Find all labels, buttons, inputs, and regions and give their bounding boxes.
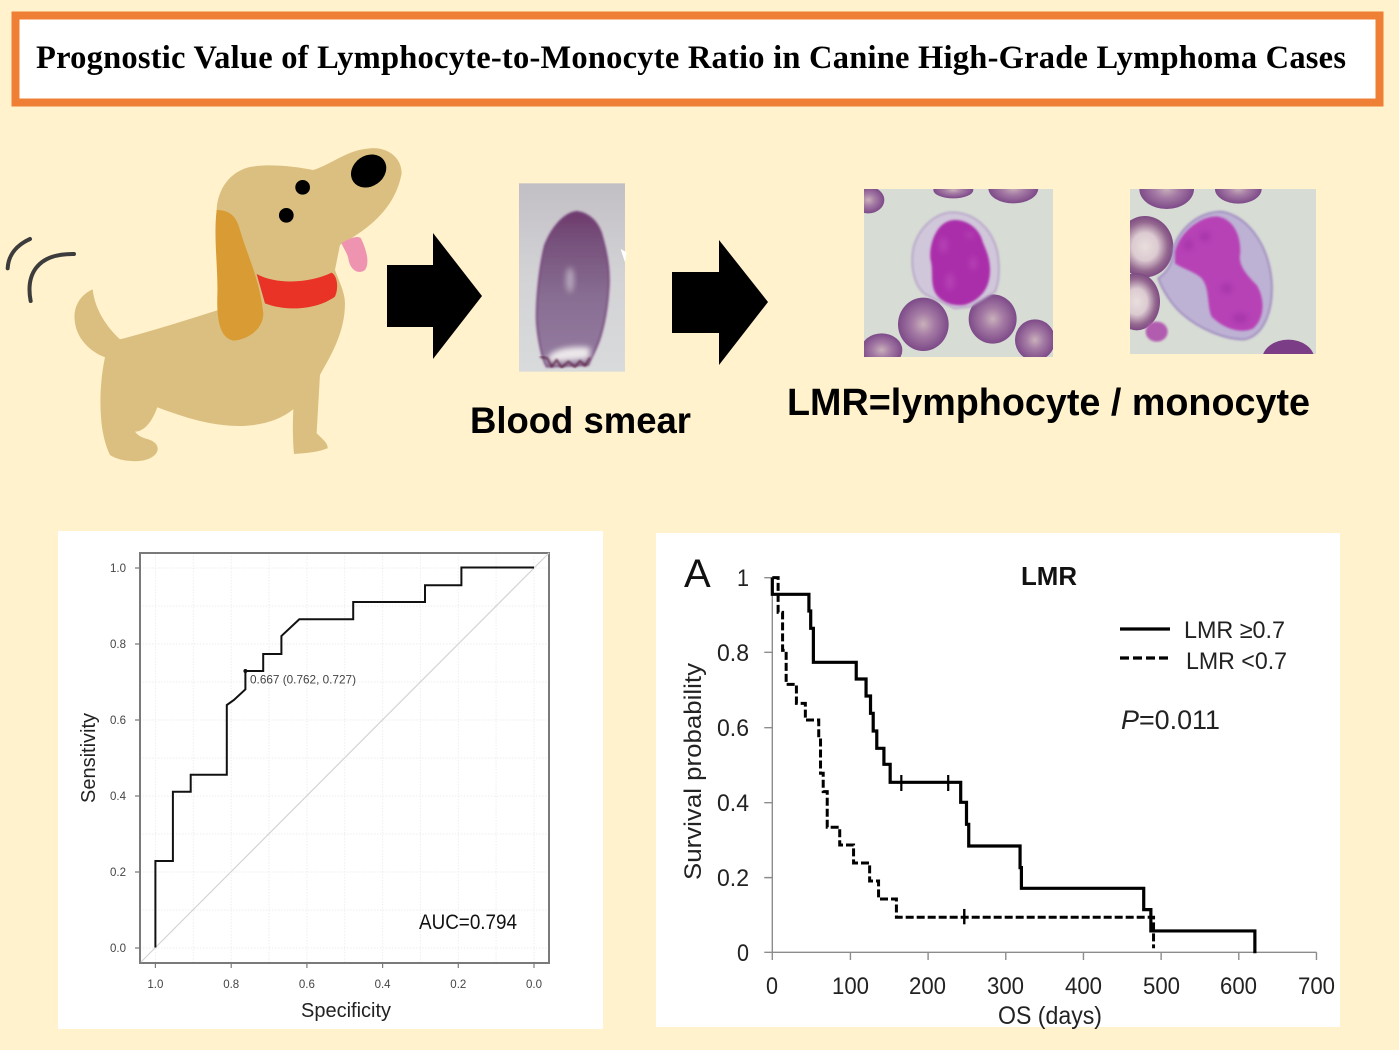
KM x axis title: OS (days) (998, 1002, 1102, 1030)
KM x tick labels: 300 (987, 973, 1024, 1000)
KM x tick labels: 500 (1143, 973, 1180, 1000)
title banner (16, 16, 1380, 102)
dog nose (345, 148, 393, 194)
KM x tick labels: 0 (766, 973, 778, 1000)
KM x tick labels: 600 (1220, 973, 1257, 1000)
image: blood smear slide (519, 183, 627, 372)
KM y tick labels: 0.2 (717, 865, 749, 892)
ROC y tick labels: 0.4 (110, 791, 127, 803)
ROC x tick labels: 0.0 (526, 979, 542, 991)
ROC curve line (155, 568, 534, 948)
dog tongue (342, 237, 367, 272)
P value: P=0.011 (1121, 705, 1220, 735)
smear on slide (537, 212, 609, 367)
monocyte cytoplasm (1158, 212, 1272, 339)
panel: ROC curve (58, 531, 603, 1029)
AUC label: AUC=0.794 (419, 911, 517, 934)
smear feathered end (547, 347, 590, 362)
label: LMR formula: LMR=lymphocyte / monocyte (787, 382, 1310, 424)
KM y tick labels: 0.4 (717, 790, 749, 817)
platelet fragment (1146, 322, 1168, 342)
left red blood cells (1130, 216, 1174, 330)
monocyte nucleus (1175, 217, 1263, 331)
smear fringe (540, 357, 590, 368)
dog body (74, 148, 402, 461)
KM legend: LMR ≥0.7 (1184, 617, 1285, 644)
label: blood smear: Blood smear (470, 400, 691, 441)
KM legend (1120, 617, 1287, 675)
KM chart title: LMR (1021, 561, 1077, 591)
KM x tick labels: 200 (909, 973, 946, 1000)
red blood cells (864, 189, 1053, 357)
ROC x tick labels: 0.8 (223, 979, 239, 991)
panel: Kaplan-Meier survival curve (656, 533, 1340, 1030)
illustration: wagging dog (8, 148, 402, 461)
ROC x axis title: Specificity (301, 1000, 391, 1022)
ROC y tick labels: 0.8 (110, 639, 126, 651)
arrow: blood smear to cells (672, 240, 768, 365)
ROC y tick labels: 0.0 (110, 943, 126, 955)
ROC x tick labels (147, 979, 542, 991)
nucleus chromatin clumps (1183, 231, 1248, 324)
dashed curve LMR below 0.7 (772, 578, 1154, 948)
ROC grid (140, 553, 549, 963)
upper red blood cells (1139, 189, 1262, 209)
lymphocyte cytoplasm (912, 212, 999, 308)
solid curve LMR at least 0.7 (772, 578, 1255, 953)
image: monocyte micrograph (1130, 189, 1316, 354)
slide glare (621, 249, 627, 262)
reference diagonal (141, 553, 549, 962)
lymphocyte nucleus (930, 220, 990, 305)
panel letter: A (684, 552, 711, 596)
KM x tick labels: 700 (1298, 973, 1335, 1000)
KM x tick labels: 100 (832, 973, 869, 1000)
ROC ticks (135, 568, 534, 968)
KM y tick labels: 0.6 (717, 715, 749, 742)
KM y tick labels: 1 (737, 565, 749, 592)
KM y tick labels (717, 565, 749, 967)
ROC y tick labels: 1.0 (110, 563, 126, 575)
ROC y axis title: Sensitivity (78, 713, 100, 803)
ROC x tick labels: 0.4 (375, 979, 391, 991)
ROC plot frame (140, 553, 549, 963)
ROC y tick labels: 0.6 (110, 715, 126, 727)
ROC x tick labels: 0.2 (450, 979, 466, 991)
cut-off point (243, 669, 247, 673)
KM y tick labels: 0.8 (717, 640, 749, 667)
ROC x tick labels: 1.0 (147, 979, 163, 991)
lower-right blood cell (1263, 340, 1314, 354)
KM y axis title: Survival probability (680, 663, 707, 880)
KM y tick labels: 0 (737, 940, 749, 967)
KM legend: LMR <0.7 (1186, 648, 1287, 675)
KM x tick labels: 400 (1065, 973, 1102, 1000)
ROC y tick labels (110, 563, 127, 955)
dog eyes (279, 180, 310, 223)
dog collar (257, 273, 337, 308)
cut-off label: 0.667 (0.762, 0.727) (250, 672, 356, 686)
nucleus chromatin highlights (939, 232, 977, 290)
title text: Prognostic Value of Lymphocyte-to-Monocyte Ratio in Canine High-Grade Lymphoma Cases (36, 40, 1346, 76)
ROC x tick labels: 0.6 (299, 979, 315, 991)
arrow: dog to blood smear (387, 233, 482, 359)
smear pale streak (566, 267, 574, 293)
image: lymphocyte micrograph (864, 189, 1053, 357)
ROC y tick labels: 0.2 (110, 867, 126, 879)
KM x tick labels (766, 973, 1335, 1000)
KM axes (764, 578, 1316, 960)
dog ear (215, 210, 263, 341)
tail wag marks (8, 239, 74, 301)
